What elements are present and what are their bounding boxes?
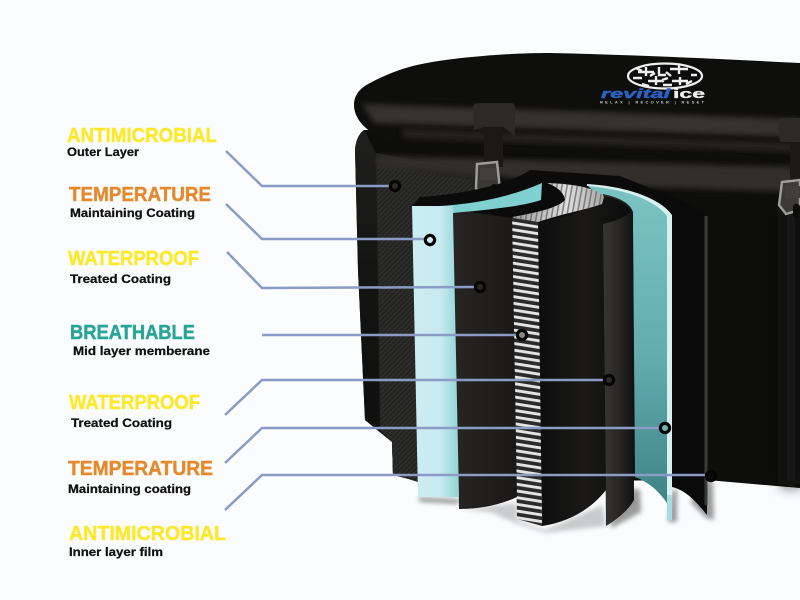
strap left — [473, 103, 515, 196]
leader 5 — [225, 380, 604, 415]
tub lower tube band — [378, 156, 800, 192]
label: waterproof 1 — [68, 247, 199, 286]
label: antimicrobial outer: Outer Layer — [67, 145, 139, 159]
layer 7 grey edge — [704, 216, 708, 505]
leader 1 — [226, 151, 390, 186]
label: waterproof 2: WATERPROOF — [69, 391, 200, 414]
product: ice tub — [354, 53, 800, 488]
label: waterproof 1: Treated Coating — [70, 272, 171, 286]
label: temperature 1: TEMPERATURE — [69, 183, 211, 206]
layer 6 light edge — [587, 184, 672, 520]
logo — [600, 64, 705, 104]
label: temperature 2: TEMPERATURE — [68, 457, 213, 480]
dark crescent — [470, 183, 566, 218]
layer 2: black — [453, 200, 541, 509]
marker dots — [390, 181, 716, 481]
lid lower band — [400, 129, 800, 152]
label: temperature 1 — [69, 183, 211, 220]
layer 5: black with grey edge — [603, 194, 634, 526]
leader 3 — [227, 252, 475, 288]
strap right — [778, 118, 800, 218]
label: temperature 1: Maintaining Coating — [70, 206, 195, 220]
layer shadows — [418, 480, 714, 533]
layer 6: teal — [587, 185, 669, 503]
tub carbon side panel — [376, 153, 485, 482]
leader 4 — [262, 334, 517, 336]
layer 1: light blue — [412, 206, 459, 497]
layer 4: wide black — [538, 196, 631, 526]
layers cutaway — [412, 170, 714, 533]
layer 3: stripes — [512, 217, 542, 526]
label: waterproof 1: WATERPROOF — [68, 247, 199, 270]
logo: revital — [601, 86, 671, 101]
lid highlight band — [362, 104, 800, 137]
leader lines — [225, 151, 705, 510]
leader 7 — [225, 475, 705, 510]
label: breathable: BREATHABLE — [70, 321, 195, 344]
leader 2 — [226, 204, 425, 239]
label: antimicrobial inner — [69, 522, 226, 559]
layer 7: inner black — [630, 188, 707, 515]
tub lid — [354, 53, 800, 158]
label: temperature 2: Maintaining coating — [68, 482, 191, 496]
label: antimicrobial inner: Inner layer film — [69, 545, 163, 559]
tub body — [355, 130, 800, 488]
label: breathable — [70, 321, 210, 358]
label: antimicrobial inner: ANTIMICROBIAL — [69, 522, 226, 545]
layer 1 teal strip — [440, 183, 542, 213]
logo: RELAX | RECOVER | RESET — [600, 100, 705, 104]
label: antimicrobial outer: ANTIMICROBIAL — [67, 124, 217, 147]
tub side edge — [355, 130, 400, 476]
label: waterproof 2: Treated Coating — [71, 416, 172, 430]
label: waterproof 2 — [69, 391, 200, 430]
tub right shade — [782, 205, 800, 485]
corrugated top — [512, 183, 604, 222]
logo: ice — [673, 86, 705, 101]
leader 6 — [225, 428, 660, 463]
label: antimicrobial outer — [67, 124, 217, 159]
black wedge behind layers — [412, 170, 705, 300]
label: breathable: Mid layer memberane — [73, 344, 210, 358]
label: temperature 2 — [68, 457, 213, 496]
